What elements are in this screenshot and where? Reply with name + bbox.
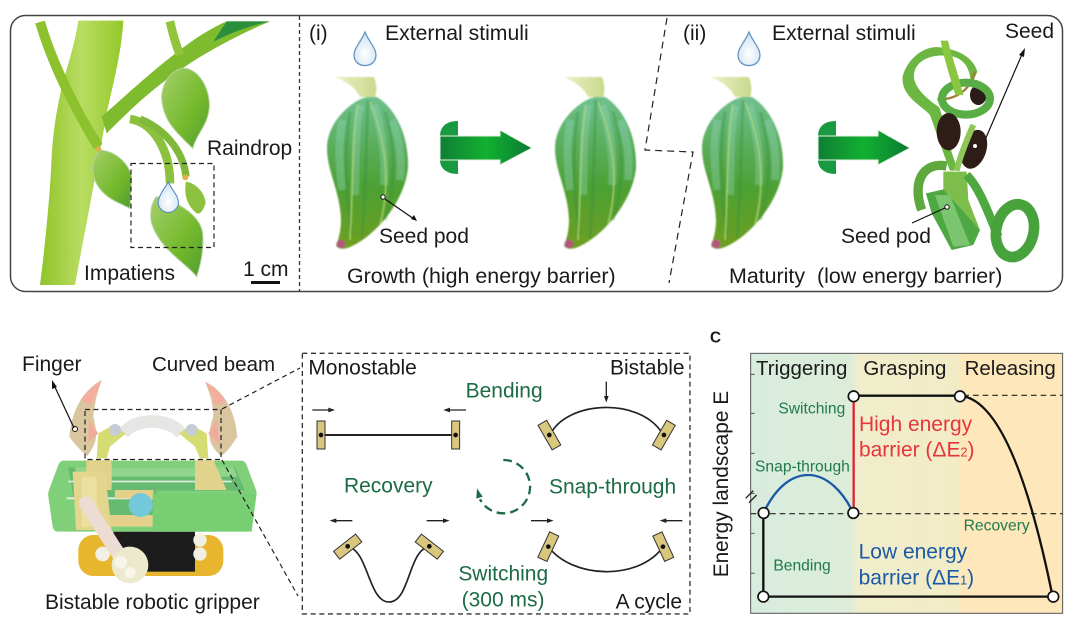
label: Impatiens: Impatiens <box>84 262 175 285</box>
label: external stimuli ii: External stimuli <box>772 22 916 45</box>
divider: growth and maturity <box>645 18 693 283</box>
label: curved beam: Curved beam <box>152 353 275 376</box>
state: bistable down <box>531 518 682 572</box>
label: maturity: Maturity (low energy barrier) <box>729 264 1002 288</box>
y axis label: Energy landscape E <box>710 391 733 577</box>
process labels: Bending <box>773 558 831 575</box>
high energy barrier: High energy <box>859 413 973 436</box>
annotation: finger: Finger <box>22 353 82 376</box>
panel: bistable cycle <box>302 353 690 614</box>
icon: raindrop on pod <box>158 182 179 212</box>
state: monostable <box>308 356 466 449</box>
low energy barrier: barrier (ΔE1) <box>859 566 974 589</box>
label: seed: Seed <box>1005 20 1054 43</box>
dashed zoom box <box>85 368 300 596</box>
illustration: bistable robotic gripper <box>48 380 257 583</box>
seed pod i right <box>555 77 636 249</box>
step labels: Snap-through <box>549 475 676 498</box>
divider: plant and pods <box>298 16 300 291</box>
energy curve <box>763 396 1053 597</box>
seed pod ii <box>702 77 783 249</box>
state: monostable: Monostable <box>308 356 417 379</box>
phase labels: Triggering <box>756 357 847 380</box>
phase labels: Grasping <box>863 357 946 380</box>
phase labels: Releasing <box>965 357 1056 380</box>
panel letter: C <box>710 330 721 347</box>
step labels: (300 ms) <box>462 589 544 612</box>
scale bar: 1 cm <box>243 258 289 281</box>
state: bistable up <box>538 356 685 450</box>
annotation: finger <box>22 353 82 432</box>
label: (ii): (ii) <box>683 22 706 45</box>
icon: water drop ii <box>738 32 760 66</box>
process labels <box>755 400 1030 575</box>
phase labels <box>756 357 1056 380</box>
label: gripper caption: Bistable robotic gripper <box>45 591 260 614</box>
high energy barrier <box>859 413 975 462</box>
icon: water drop i <box>354 32 376 66</box>
panel: energy landscape chart <box>710 330 1063 613</box>
label: growth: Growth (high energy barrier) <box>347 264 616 288</box>
label: seed <box>973 20 1054 148</box>
state points <box>758 391 1059 602</box>
arrow i <box>440 121 532 174</box>
low energy barrier: Low energy <box>859 540 968 563</box>
panel: impatiens seed pods <box>10 16 1062 292</box>
high barrier line <box>850 397 857 513</box>
arrow ii <box>818 121 910 174</box>
cycle arrow <box>476 460 530 513</box>
state: switching shape <box>330 518 450 602</box>
step labels: Switching <box>458 563 548 586</box>
step labels <box>344 380 682 613</box>
label: (i): (i) <box>309 22 328 45</box>
process labels: Snap-through <box>755 459 850 476</box>
low barrier curve <box>763 475 853 513</box>
axis break <box>746 491 757 503</box>
label: seed pod ii: Seed pod <box>841 225 931 248</box>
step labels: Bending <box>466 380 543 403</box>
axis ticks <box>751 374 755 573</box>
dashed crop box <box>131 164 214 248</box>
state: bistable up: Bistable <box>610 356 685 379</box>
low energy barrier <box>859 540 974 589</box>
label: external stimuli i: External stimuli <box>385 22 529 45</box>
label: seed pod ii <box>841 205 949 248</box>
process labels: Switching <box>778 400 845 417</box>
annotation: seed pod i: Seed pod <box>379 225 469 248</box>
step labels: A cycle <box>616 590 682 613</box>
label: Raindrop: Raindrop <box>207 137 292 160</box>
plot background <box>751 353 1063 613</box>
high energy barrier: barrier (ΔE2) <box>859 439 975 462</box>
photo: impatiens plant <box>40 21 270 285</box>
annotation: seed pod i <box>379 195 469 248</box>
process labels: Recovery <box>964 517 1030 534</box>
dashed levels <box>751 395 1063 514</box>
step labels: Recovery <box>344 475 433 498</box>
photo: opened seed pod <box>903 41 1039 261</box>
seed pod i left <box>327 77 408 249</box>
